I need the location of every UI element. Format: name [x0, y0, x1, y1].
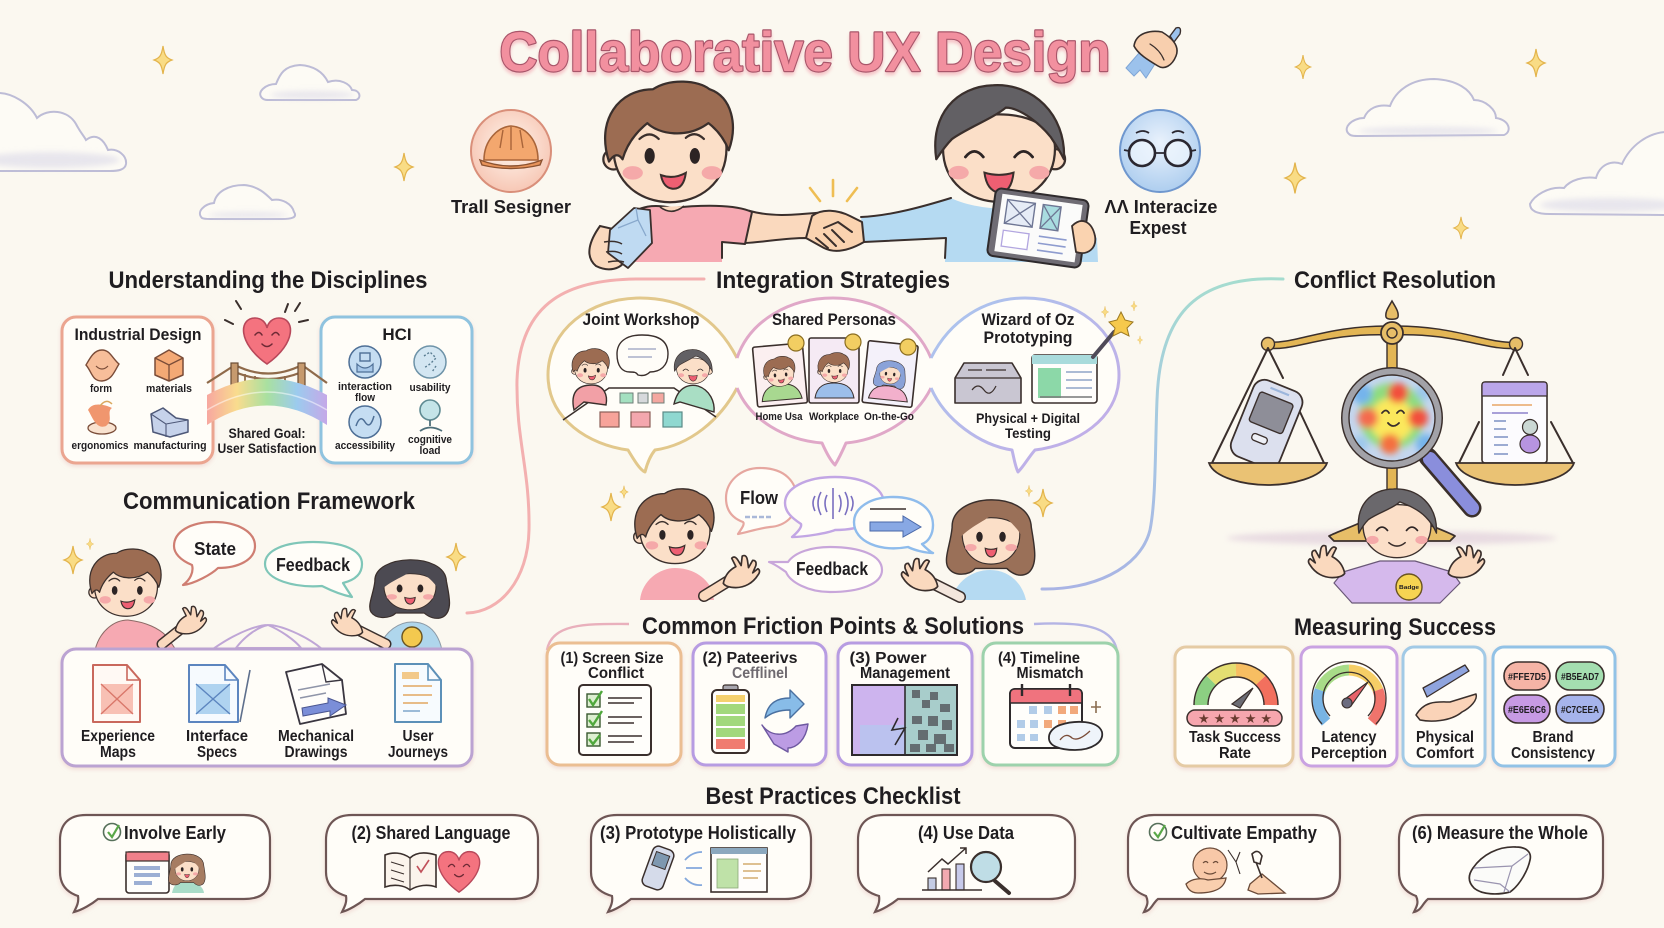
bridge with heart: User Satisfaction: [218, 440, 316, 456]
panel: brand consistency: Consistency: [1511, 745, 1595, 762]
scale base shadow: [1227, 531, 1557, 545]
conflict resolution illustration: [1209, 301, 1574, 603]
panel: physical comfort: Comfort: [1416, 745, 1475, 762]
bubble: shared personas: Home Usa: [756, 411, 803, 423]
icon: book: [385, 853, 436, 890]
icon: chart and magnifier: [922, 848, 1009, 893]
panel: hci: HCI: [382, 325, 412, 344]
panel: hci: accessibility: [335, 440, 396, 452]
icon: accessibility: [349, 406, 381, 438]
clouds: [0, 65, 1664, 219]
icon: cognitive load: [420, 400, 442, 431]
icon: user journey document: [395, 664, 441, 722]
icon: glasses badge: [1120, 110, 1200, 192]
card: prototype holistically: [591, 815, 811, 912]
icon: heart: [438, 852, 480, 892]
workshop scene: [563, 335, 716, 427]
panel: industrial design: ergonomics: [72, 440, 128, 452]
panel: screen size conflict: Conflict: [588, 665, 645, 682]
panel: brand consistency: [1493, 647, 1615, 766]
panel: industrial design: Industrial Design: [74, 325, 202, 344]
character: mediator: Badge: [1399, 585, 1419, 591]
swatch: lilac: #E6E6C6: [1508, 705, 1546, 716]
sparkles: [154, 46, 1545, 239]
label: interaction expert: [1104, 197, 1218, 238]
heading: measuring success: Measuring Success: [1294, 614, 1496, 641]
bubble: joint workshop: [548, 298, 737, 472]
panel: industrial design: [62, 317, 213, 463]
bubble: feedback: [265, 542, 362, 597]
bubble: wizard of oz: [931, 298, 1143, 472]
bubble: shared personas: [737, 298, 931, 465]
character: boy in conversation: [634, 489, 760, 600]
icon: caring hands: [1186, 848, 1285, 894]
panel: communication artifacts: Mechanical: [278, 728, 354, 745]
panel: task success rate: Rate: [1219, 745, 1251, 762]
conversation scene: [602, 468, 1052, 600]
panel: battery conflict: Cefflinel: [732, 665, 788, 682]
panel: latency perception: Perception: [1311, 745, 1387, 762]
heading: integration strategies: Integration Strategies: [716, 267, 950, 294]
panel: power management: (3) Power: [850, 650, 926, 667]
swatch: peach: #FFE7D5: [1508, 672, 1546, 683]
bubble fills: [548, 298, 1119, 472]
card: cultivate empathy: Cultivate Empathy: [1171, 823, 1317, 843]
icon: device on hand: [1416, 665, 1476, 721]
panel: screen size conflict: (1) Screen Size: [560, 650, 664, 667]
panel: industrial design: form: [90, 383, 112, 395]
bubble: sound waves: [785, 477, 884, 537]
persona card: home use: [752, 343, 808, 407]
panel: power management: Management: [860, 665, 951, 682]
character: boy: [89, 549, 206, 650]
heading: common friction points: Common Friction Points & Solutions: [642, 613, 1024, 640]
speedometer: [1312, 662, 1386, 724]
panel: communication artifacts: Specs: [197, 744, 237, 761]
panel: battery conflict: (2) Pateerivs: [702, 650, 798, 667]
icon: check: [1150, 824, 1166, 840]
icon: interaction flow: [349, 346, 381, 378]
panel: latency perception: [1301, 647, 1397, 766]
bubble: wizard of oz: Testing: [1005, 425, 1051, 441]
panel: communication artifacts: User: [402, 728, 434, 745]
bubble: arrow: [854, 497, 933, 553]
connection arcs: [213, 625, 322, 649]
panel: task success rate: [1175, 647, 1293, 766]
card: cultivate empathy: [1128, 815, 1340, 912]
icon: battery: [712, 685, 749, 753]
panel: industrial design: manufacturing: [134, 440, 206, 452]
expert shirt and arm: [861, 198, 1098, 262]
label: interaction expert: Expest: [1130, 218, 1187, 238]
panel: communication artifacts: Experience: [81, 728, 155, 745]
bridge with heart: [207, 301, 327, 456]
icon: experience map document: [93, 665, 140, 722]
icon: calendar and child: [126, 852, 205, 893]
bubble: shared personas: Shared Personas: [772, 310, 896, 329]
icon: mechanical drawing document: [286, 664, 346, 724]
bubble: state: [174, 522, 255, 585]
prototype box: [955, 363, 1021, 403]
bubble: joint workshop: Joint Workshop: [582, 310, 700, 329]
boy hand and product: [589, 208, 652, 269]
prototype browser: [1032, 355, 1097, 403]
magic wand: [1093, 301, 1143, 357]
panel: hci: interaction: [338, 381, 392, 393]
tablet: [987, 188, 1089, 268]
bubble: state: State: [194, 539, 236, 559]
character: mediator: [1308, 489, 1485, 603]
scale beam: [1262, 322, 1522, 350]
digital interface: [1482, 382, 1547, 463]
panel: hci: load: [420, 445, 440, 457]
icon: usability: [414, 346, 446, 378]
panel: task success rate: Task Success: [1189, 729, 1281, 746]
icon: manufacturing: [151, 408, 188, 437]
persona card: on the go: [862, 341, 918, 407]
panel: timeline mismatch: Mismatch: [1016, 665, 1084, 682]
character: girl in conversation: [901, 500, 1035, 600]
gauge: [1194, 663, 1278, 708]
physical device: [1227, 376, 1306, 472]
left scale pan with device: [1209, 348, 1327, 485]
icon: physical product: [1469, 847, 1530, 894]
icon: interface spec document: [189, 665, 250, 722]
panel: communication artifacts: Maps: [100, 744, 136, 761]
bubble: wizard of oz: Prototyping: [984, 328, 1072, 347]
icon: calendar: [1010, 684, 1082, 748]
title: Collaborative UX Design: [500, 20, 1110, 83]
icon: check: [104, 824, 120, 840]
heading: best practices checklist: Best Practices Checklist: [706, 783, 961, 810]
handshake: [806, 180, 864, 251]
panel: physical comfort: [1403, 647, 1485, 766]
icon: ergonomics: [88, 401, 116, 434]
panel: timeline mismatch: (4) Timeline: [998, 650, 1080, 667]
icon: cycle arrows: [762, 690, 808, 752]
card: use data: (4) Use Data: [918, 823, 1015, 843]
icon: split screen: [852, 685, 957, 755]
boy head: [603, 82, 733, 202]
connector: to conflict resolution: [1042, 279, 1283, 589]
card: shared language: (2) Shared Language: [352, 823, 510, 843]
expert hand: [1072, 221, 1095, 253]
icon: hard hat badge: [471, 110, 551, 192]
panel: timeline mismatch: [983, 643, 1118, 765]
expert head: [935, 85, 1065, 202]
bubble: shared personas: Workplace: [809, 411, 859, 423]
bubble: shared personas: On-the-Go: [864, 411, 914, 423]
card: shared language: [326, 815, 538, 912]
persona badges: [788, 334, 916, 355]
right scale pan with browser: [1456, 348, 1574, 485]
boy shirt and arm: [612, 206, 834, 262]
bubble: feedback: Feedback: [796, 559, 869, 579]
bridge with heart: Shared Goal:: [228, 425, 306, 441]
label: interaction expert: ΛΛ Interacize: [1104, 197, 1218, 217]
card: involve early: [60, 815, 270, 912]
persona card: workplace: [809, 338, 859, 403]
panel: screen size conflict: [547, 643, 681, 765]
bubble: feedback: [769, 547, 882, 592]
icon: hand and brush: [1126, 28, 1180, 78]
magnifier with heatmap: [1342, 368, 1472, 508]
icon: materials: [155, 350, 183, 381]
label: designer: Trall Sesigner: [451, 197, 571, 217]
connector: to communication framework: [467, 279, 704, 613]
integration strategy bubbles: [548, 298, 1143, 472]
card: measure the whole: [1399, 815, 1603, 912]
swatch: periwinkle: #C7CEEA: [1561, 705, 1599, 716]
character: large boy with product: [589, 82, 834, 269]
panel: communication artifacts: Journeys: [388, 744, 448, 761]
heading: communication framework: Communication Framework: [123, 488, 416, 515]
heading: conflict resolution: Conflict Resolution: [1294, 267, 1496, 294]
swatch: mint: #B5EAD7: [1561, 672, 1599, 683]
star rating pill: ★★★★★: [1198, 712, 1272, 727]
panel: brand consistency: Brand: [1532, 729, 1574, 746]
panel: battery conflict: [693, 643, 826, 765]
icon: checklist: [579, 685, 651, 755]
panel: physical comfort: Physical: [1416, 729, 1474, 746]
panel: hci: cognitive: [408, 434, 452, 446]
panel: communication artifacts: [62, 649, 472, 766]
panel: latency perception: Latency: [1322, 729, 1377, 746]
panel: communication artifacts: Drawings: [284, 744, 348, 761]
panel: communication artifacts: Interface: [186, 728, 248, 745]
panel: power management: [838, 643, 972, 765]
character: girl: [332, 560, 450, 650]
panel: hci: [321, 317, 472, 463]
bubble: wizard of oz: Wizard of Oz: [982, 310, 1074, 329]
rainbow bridge: [207, 363, 327, 425]
card: use data: [858, 815, 1075, 912]
friction brackets: [547, 623, 1117, 652]
heading: understanding the disciplines: Understanding the Disciplines: [108, 267, 428, 294]
bubble: flow: Flow: [740, 488, 779, 508]
card: measure the whole: (6) Measure the Whole: [1412, 823, 1588, 843]
communication scene: [64, 522, 465, 650]
panel: industrial design: materials: [146, 383, 192, 395]
heart with smile: [244, 318, 290, 364]
panel: hci: usability: [410, 382, 451, 394]
card: involve early: Involve Early: [124, 823, 226, 843]
cloud shading: [0, 91, 1664, 218]
bubble: wizard of oz: Physical + Digital: [976, 410, 1080, 426]
character: large expert with tablet: [861, 85, 1098, 268]
bubble: flow: [726, 468, 797, 534]
scale stand: [1329, 301, 1455, 541]
bubble: feedback: Feedback: [276, 555, 351, 575]
icon: device to interface: [640, 845, 767, 892]
icon: delay bubble: [1049, 701, 1102, 750]
panel: hci: flow: [355, 392, 375, 404]
icon: form: [86, 350, 119, 381]
card: prototype holistically: (3) Prototype Holistically: [600, 823, 796, 843]
